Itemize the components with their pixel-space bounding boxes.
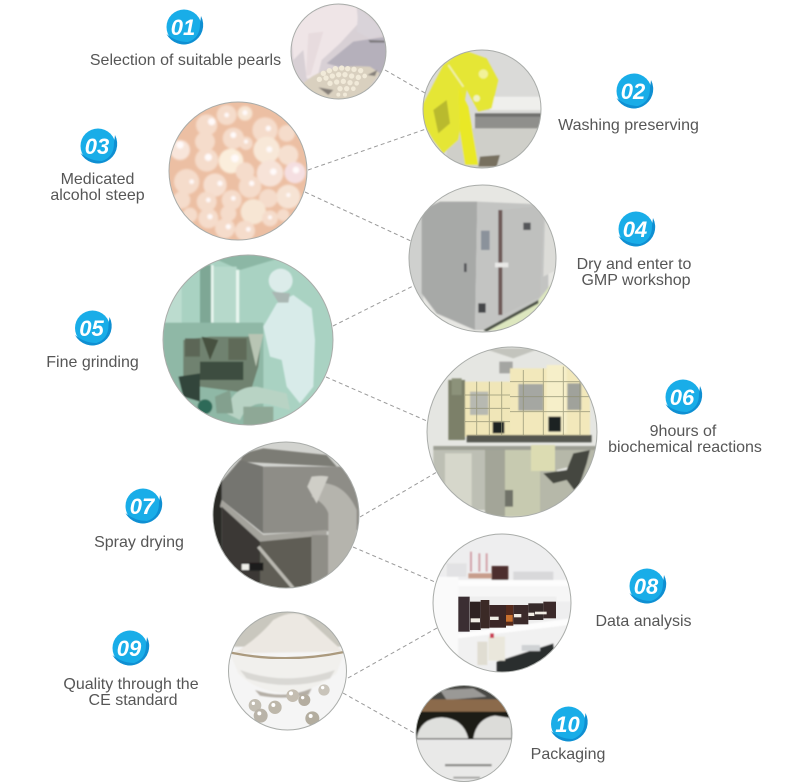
badge 07 bbox=[126, 488, 162, 524]
photo: laboratory shelves bbox=[432, 532, 573, 673]
badge 06 bbox=[666, 380, 702, 414]
connector: step 4 to step 5 bbox=[333, 285, 415, 326]
badge 01 bbox=[166, 10, 203, 44]
label: step 6: 9hours of bbox=[650, 423, 717, 440]
label: step 9: Quality through the bbox=[63, 676, 199, 693]
badge 03 bbox=[80, 128, 117, 164]
badge 01: 01 bbox=[171, 15, 195, 40]
badge 04 bbox=[618, 212, 655, 246]
connector: step 8 to step 9 bbox=[348, 628, 437, 678]
connector: step 1 to step 2 bbox=[385, 70, 425, 93]
badge 02 bbox=[616, 74, 653, 108]
label: step 6: biochemical reactions bbox=[608, 439, 762, 456]
label: step 4: GMP workshop bbox=[581, 272, 691, 289]
connector: step 5 to step 6 bbox=[326, 377, 427, 421]
connector: step 9 to step 10 bbox=[343, 693, 416, 734]
badge 09: 09 bbox=[117, 636, 142, 661]
badge 05: 05 bbox=[79, 316, 104, 341]
badge 08 bbox=[630, 568, 666, 604]
label: step 2: Washing preserving bbox=[558, 117, 699, 134]
photo: washing pearls with yellow gloves bbox=[422, 50, 542, 168]
badge 03: 03 bbox=[85, 134, 109, 159]
photo: gloved hand selecting pearls bbox=[290, 0, 387, 100]
label: step 1: Selection of suitable pearls bbox=[90, 52, 281, 69]
badge 06: 06 bbox=[670, 385, 695, 410]
label: step 8: Data analysis bbox=[595, 613, 692, 630]
badge 10: 10 bbox=[555, 712, 580, 737]
badge 07: 07 bbox=[130, 494, 156, 519]
photo: white pearl powder in bowl bbox=[227, 610, 348, 732]
label: step 5: Fine grinding bbox=[46, 354, 139, 371]
photo: spray drying tank bbox=[210, 440, 363, 592]
label: step 3: Medicated bbox=[61, 171, 134, 188]
photo: pearls steeping bbox=[165, 98, 311, 244]
photo: drying oven bbox=[407, 183, 560, 333]
badge 10 bbox=[551, 706, 588, 742]
label: step 10: Packaging bbox=[531, 746, 605, 763]
label: step 9: CE standard bbox=[89, 692, 177, 709]
badge 05 bbox=[75, 310, 112, 346]
badge 02: 02 bbox=[621, 79, 646, 104]
connector: step 7 to step 8 bbox=[353, 547, 435, 582]
connector: step 6 to step 7 bbox=[360, 472, 437, 517]
photo: biochemical reaction tanks bbox=[425, 345, 602, 520]
connector: step 3 to step 4 bbox=[305, 192, 411, 241]
badge 08: 08 bbox=[634, 574, 659, 599]
label: step 4: Dry and enter to bbox=[577, 256, 691, 273]
label: step 3: alcohol steep bbox=[50, 187, 145, 204]
connector: step 2 to step 3 bbox=[308, 129, 426, 170]
badge 04: 04 bbox=[623, 217, 647, 242]
label: step 7: Spray drying bbox=[94, 534, 184, 551]
badge 09 bbox=[112, 630, 149, 666]
photo: packaging box bbox=[413, 683, 513, 783]
photo: fine grinding in clean room bbox=[160, 253, 337, 427]
